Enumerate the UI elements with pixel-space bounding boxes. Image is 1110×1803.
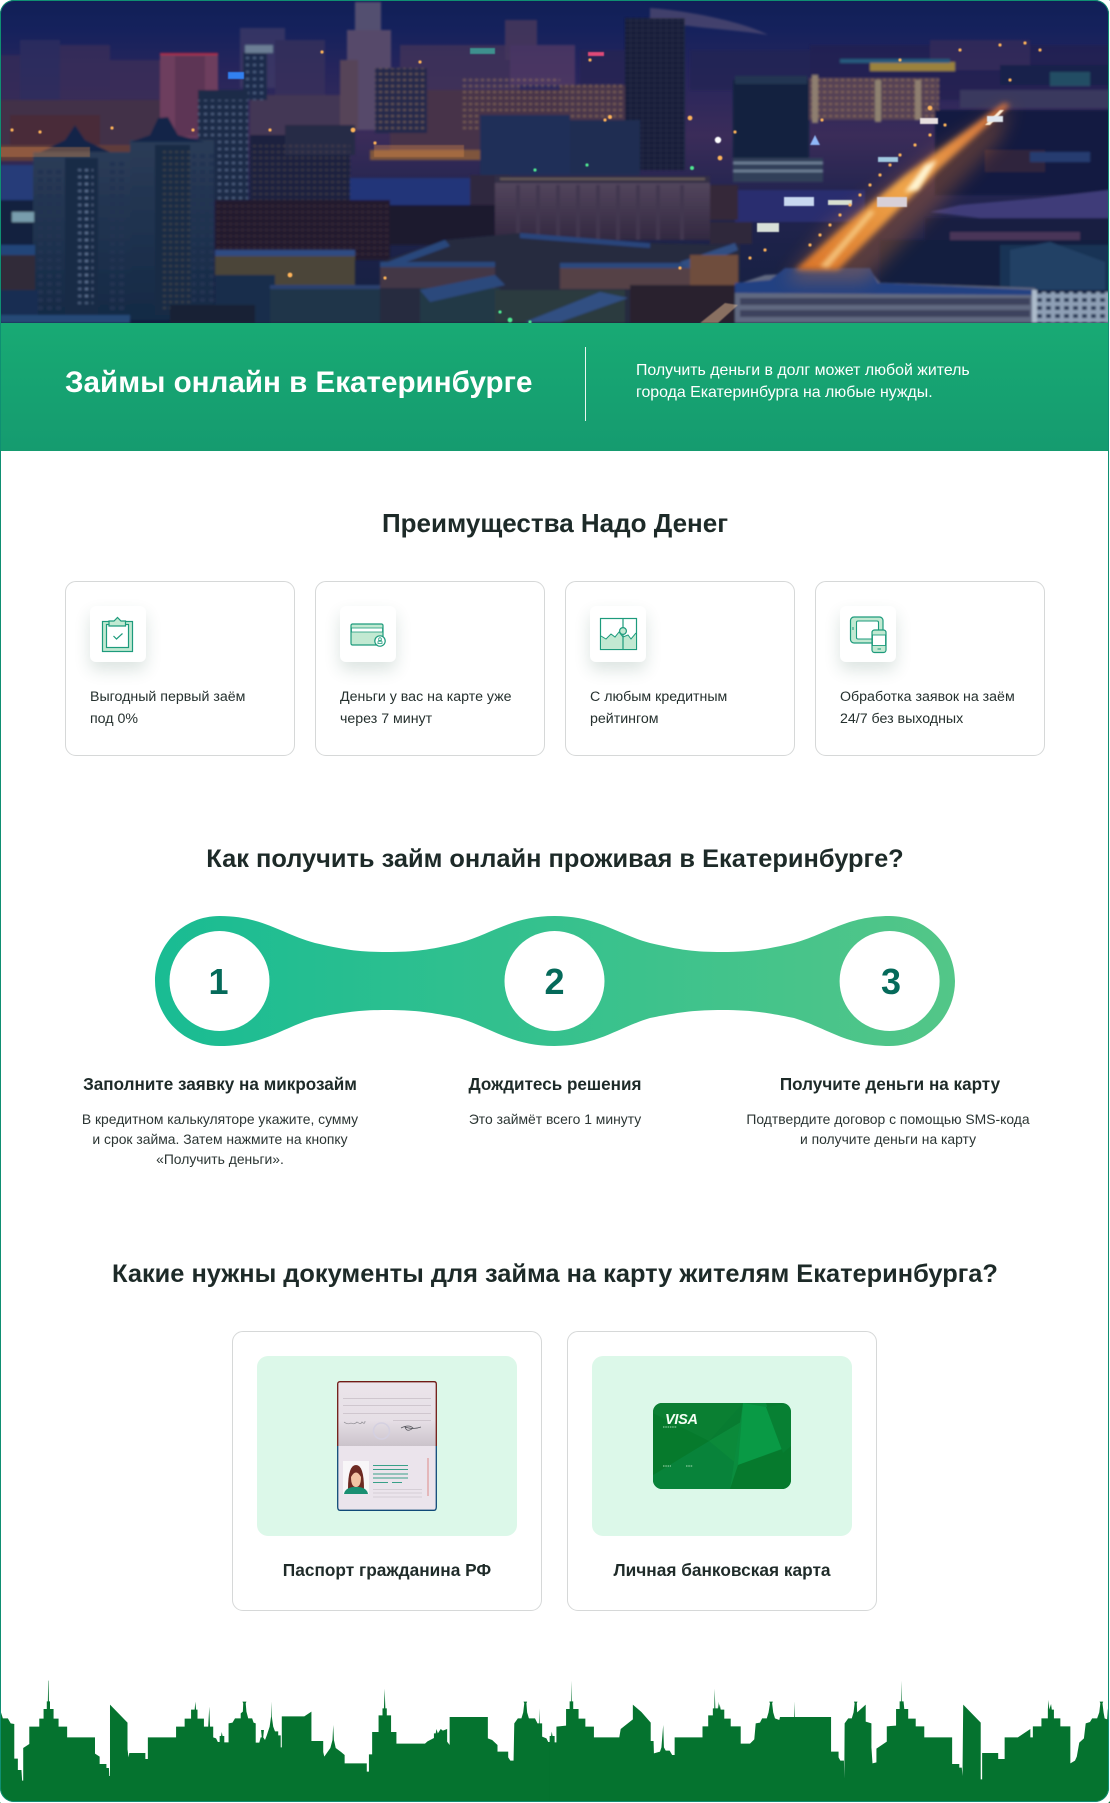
pink tower (160, 54, 218, 138)
card text: 24/7 без выходных (840, 711, 963, 727)
road and glow (700, 103, 1012, 323)
left front towers (33, 152, 131, 320)
advantage card 2 (315, 581, 545, 756)
round dark tower (733, 80, 809, 180)
icon: rating chart (590, 606, 646, 662)
card text: Выгодный первый заём (90, 689, 245, 705)
divider (584, 347, 586, 421)
header band (0, 323, 1110, 451)
courtyard buildings (380, 233, 740, 323)
step circle 2: 2 (544, 961, 565, 1002)
label: Личная банковская карта (613, 1560, 831, 1580)
snow river right (930, 190, 1110, 222)
heading: how to get a loan: Как получить займ онлайн проживая в Екатеринбурге? (206, 845, 904, 873)
card text: Деньги у вас на карте уже (340, 689, 512, 705)
mid skyscrapers (243, 52, 267, 100)
step circle 3: 3 (881, 961, 901, 1002)
document card: bank card (567, 1331, 877, 1611)
card text (840, 689, 1015, 727)
step circle 1: 1 (208, 961, 229, 1002)
step 2 title: Дождитесь решения (468, 1075, 642, 1094)
snow fields (0, 165, 40, 235)
heading: advantages: Преимущества Надо Денег (382, 508, 728, 538)
residential lit block (809, 78, 939, 120)
intro text: города Екатеринбурга на любые нужды. (636, 384, 933, 401)
step 1 description: В кредитном калькуляторе укажите, сумму (82, 1111, 358, 1127)
label: Паспорт гражданина РФ (283, 1560, 491, 1580)
hero photo: night city skyline (0, 0, 1110, 323)
card text: С любым кредитным (590, 689, 727, 705)
tall tower with glass block (355, 2, 381, 34)
card text: через 7 минут (340, 711, 432, 727)
silos (470, 175, 510, 235)
step 2 description: Это займёт всего 1 минуту (469, 1111, 641, 1127)
skyline silhouette (0, 1680, 1110, 1803)
icon: bank card (340, 606, 396, 662)
VISA logo: VISA (665, 1412, 698, 1428)
step 1 title: Заполните заявку на микрозайм (83, 1075, 357, 1094)
brick row behind left towers (215, 200, 390, 260)
advantage card 1 (65, 581, 295, 756)
icon: clipboard (90, 606, 146, 662)
advantage card 3 (565, 581, 795, 756)
step circle 2 (504, 931, 604, 1031)
distant city band (0, 20, 1110, 145)
card text: рейтингом (590, 711, 658, 727)
dark tower (625, 18, 685, 170)
step 1 description (82, 1111, 358, 1167)
mid-ground blocks (0, 100, 165, 160)
step 3 title: Получите деньги на карту (780, 1075, 1000, 1094)
illustration panel: passport (257, 1356, 517, 1536)
card text (340, 689, 512, 727)
intro text (636, 362, 970, 401)
main title: Займы онлайн в Екатеринбурге (65, 366, 532, 399)
step 1 description: «Получить деньги». (156, 1151, 284, 1167)
stadium (870, 62, 955, 71)
card text (590, 689, 727, 727)
advantage card 4 (815, 581, 1045, 756)
step 3 description (746, 1111, 1030, 1147)
intro text: Получить деньги в долг может любой житель (636, 362, 970, 379)
left edge buildings (0, 200, 33, 250)
icon: tablet and phone (840, 606, 896, 662)
night tone overlay (0, 0, 1110, 323)
card text (90, 689, 245, 727)
illustration panel: green Visa card (592, 1356, 852, 1536)
lower right office (735, 270, 1035, 323)
step 3 description: Подтвердите договор с помощью SMS-кода (746, 1111, 1030, 1127)
steps ribbon with numbers (155, 916, 955, 1046)
step 1 description: и срок займа. Затем нажмите на кнопку (92, 1131, 348, 1147)
step circle 1 (170, 931, 270, 1031)
far right area (960, 90, 1110, 108)
step 3 description: и получите деньги на карту (800, 1131, 976, 1147)
document card: passport (232, 1331, 542, 1611)
heading: required documents: Какие нужны документы для займа на карту жителям Екатеринбурга? (112, 1260, 998, 1288)
billboards and lights (0, 41, 1042, 324)
card text: под 0% (90, 711, 138, 727)
card text: Обработка заявок на заём (840, 689, 1015, 705)
step circle 3 (840, 931, 940, 1031)
